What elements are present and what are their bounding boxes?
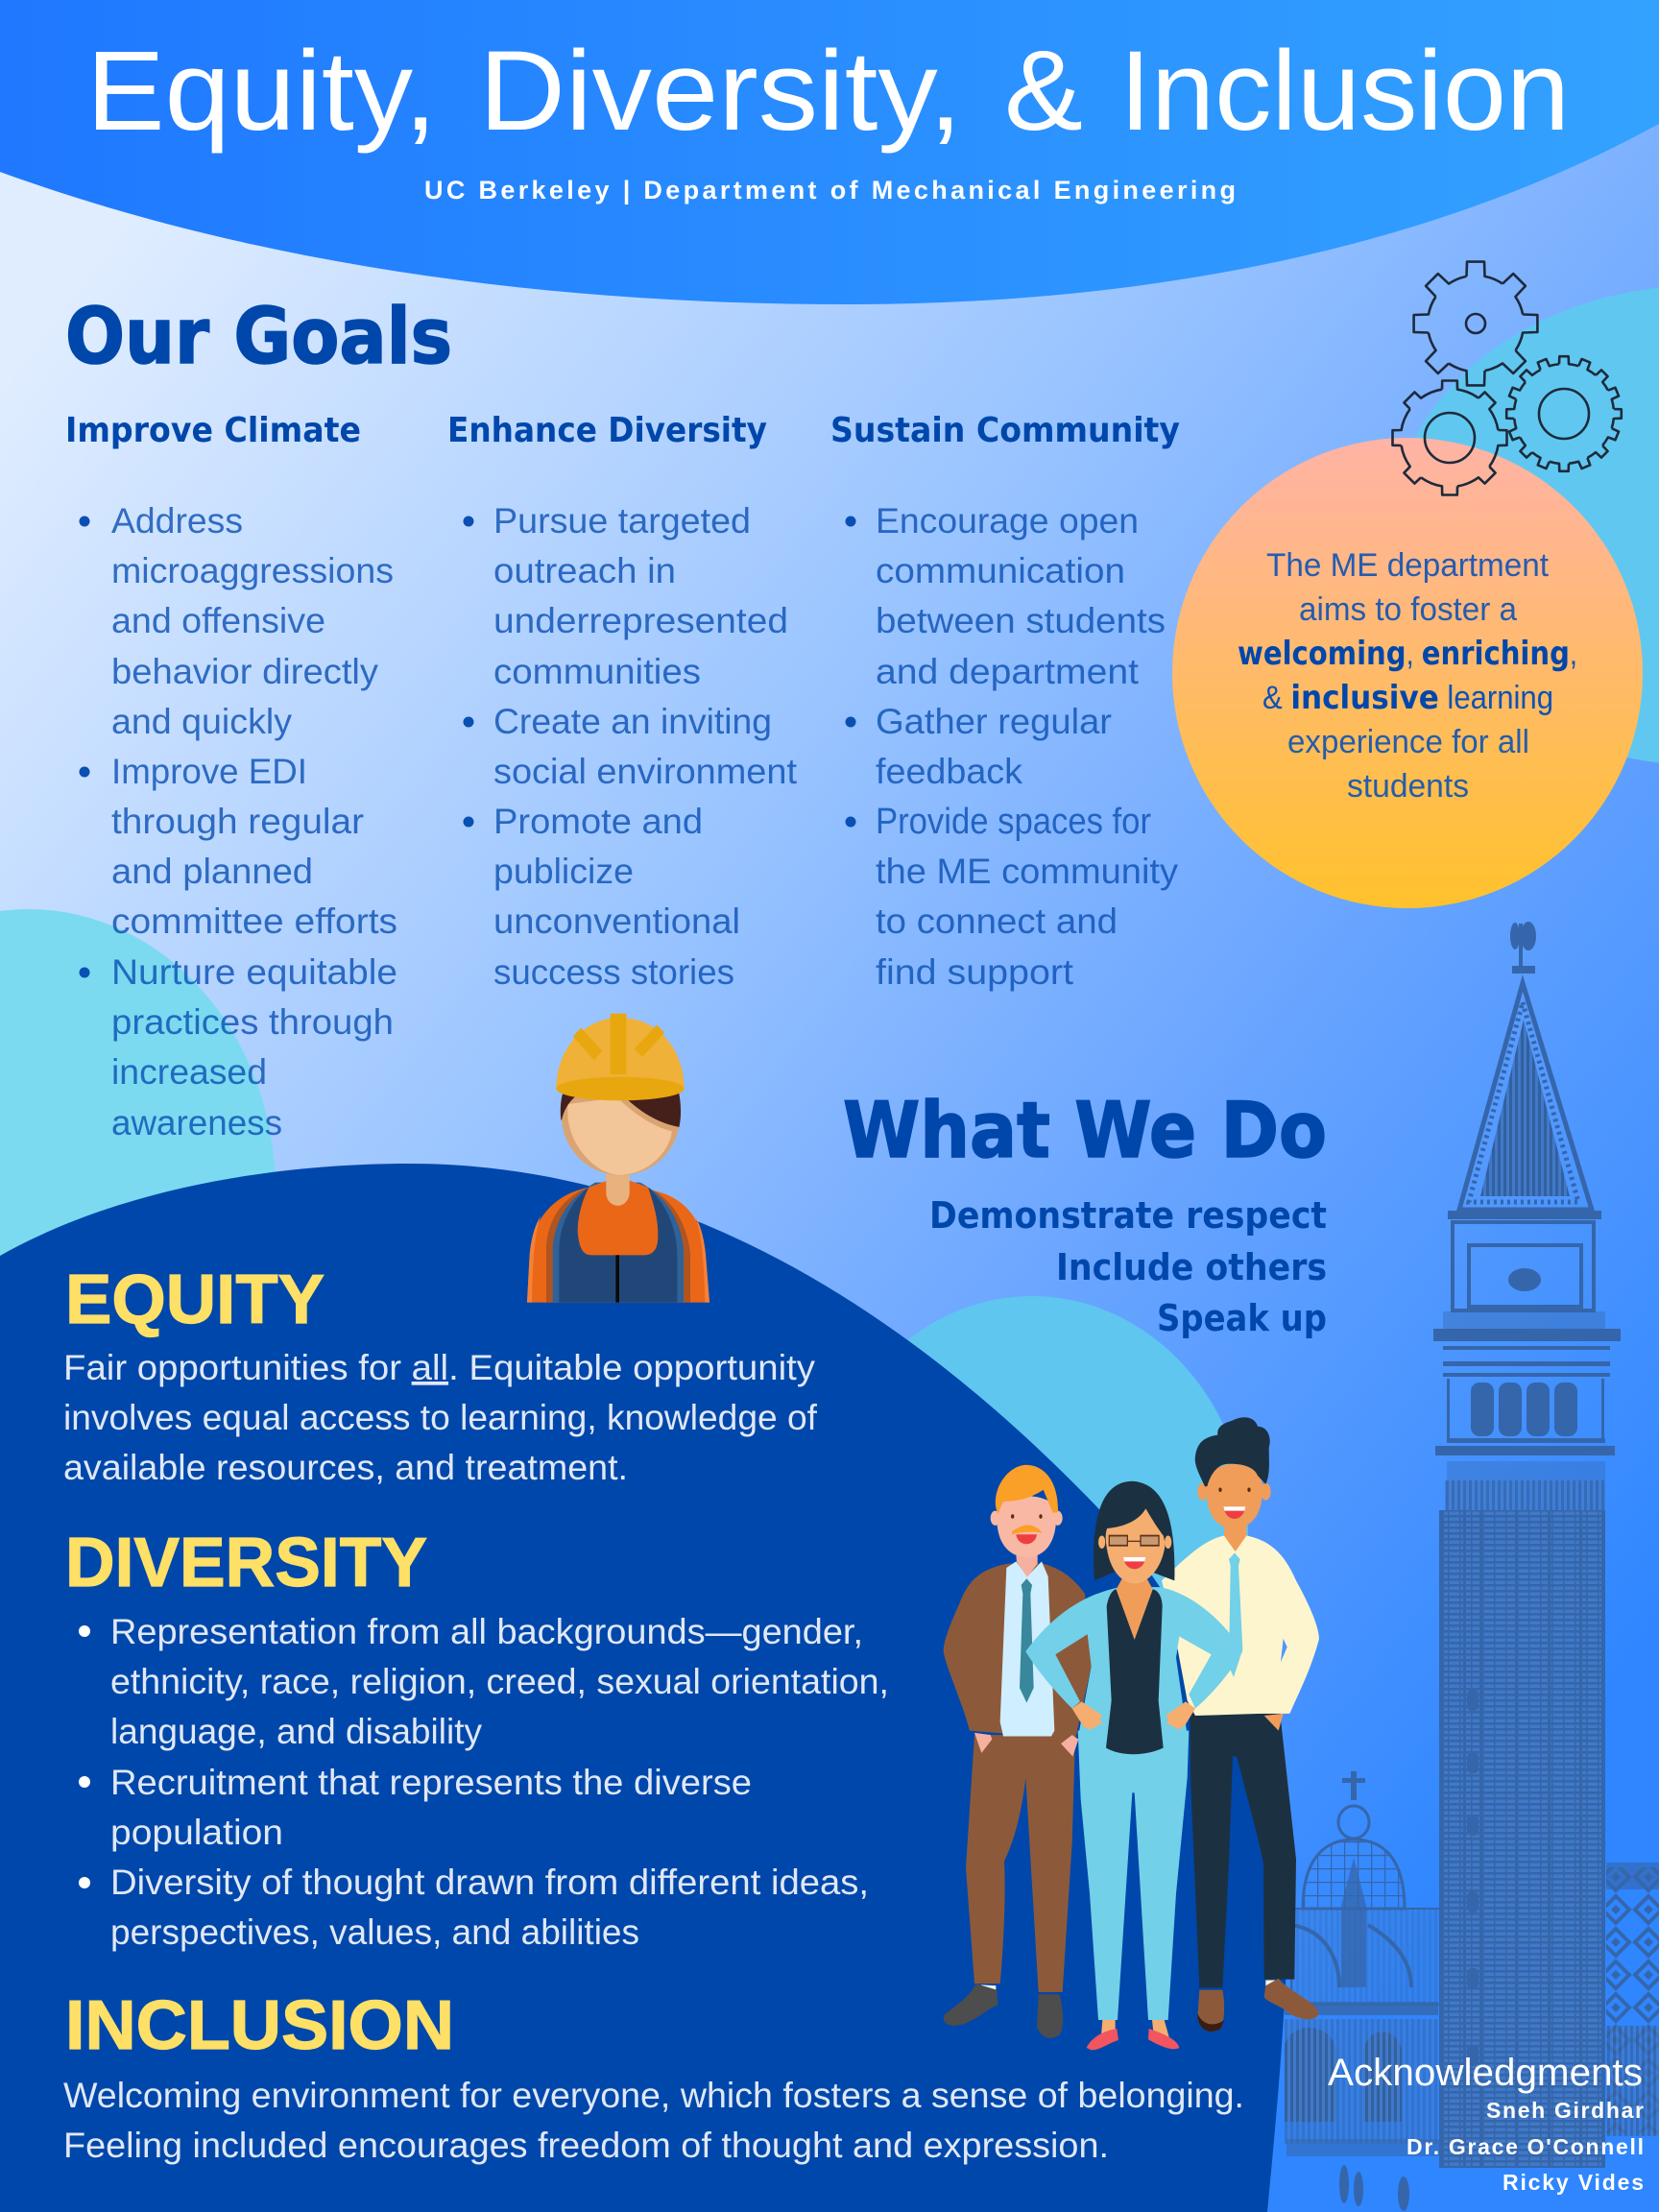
callout: mission circle: welcoming, enriching, [1238,635,1577,673]
title: Inclusion [1119,28,1570,155]
list: diversity points: perspectives, values, and abilities [110,1912,639,1952]
text: inclusion definition: Feeling included encourages freedom of thought and expression. [63,2126,1109,2165]
title: & [1004,28,1083,155]
panel: improve climate: and offensive [111,601,325,640]
basilica [1285,1771,1498,2211]
panel: sustain community: Encourage open [876,501,1139,541]
text: inclusion definition: Welcoming environment for everyone, which fosters a sense of belonging. [63,2076,1244,2115]
right palace [1606,1863,1659,2136]
figure: man in cream shirt [1162,1417,1319,2032]
heading: What We Do: What We Do [843,1086,1327,1175]
list: diversity points: Diversity of thought drawn from different ideas, [110,1863,869,1902]
heading: INCLUSION: INCLUSION [65,1987,454,2064]
title [86,28,1570,155]
panel: sustain community: Gather regular [876,702,1112,741]
panel: enhance diversity: unconventional [493,902,740,941]
panel: enhance diversity: communities [493,652,701,691]
text: acknowledgments: Dr. Grace O'Connell [1407,2134,1644,2159]
callout: mission circle: The ME department [1266,547,1550,584]
text: equity definition: Fair opportunities for all. Equitable opportunity [63,1348,816,1387]
panel: sustain community: between students [876,601,1166,640]
column heading: Sustain Community [830,411,1180,450]
panel: enhance diversity [447,411,798,992]
panel: improve climate: Improve EDI [111,752,307,791]
list: diversity points: population [110,1813,283,1852]
column heading: Enhance Diversity [447,411,767,450]
text: acknowledgments: Sneh Girdhar [1486,2098,1644,2123]
list: actions [929,1194,1327,1339]
panel: sustain community: find support [876,952,1074,992]
panel: navy definitions background [0,1164,1286,2212]
heading: Our Goals: Our Goals [65,292,452,381]
panel: improve climate: and planned [111,852,313,891]
callout: mission circle [1172,438,1643,908]
text: equity definition: involves equal access to learning, knowledge of [63,1398,818,1437]
panel: sustain community [830,411,1180,992]
panel: improve climate: microaggressions [111,551,394,590]
list: actions: Speak up [1157,1297,1327,1339]
list: diversity points [79,1612,889,1952]
icon: gears [1389,261,1623,498]
blob: turquoise behind people [816,1296,1248,1776]
column heading: Improve Climate [65,411,361,450]
figure: man in brown suit [944,1465,1092,2038]
header curved panel [0,0,1659,304]
list: diversity points: Representation from all backgrounds—gender, [110,1612,863,1651]
panel: enhance diversity: success stories [493,952,734,992]
panel: improve climate: increased [111,1052,267,1092]
panel: improve climate: behavior directly [111,652,379,691]
panel: sustain community: Provide spaces for [876,802,1151,842]
heading: DIVERSITY: DIVERSITY [65,1525,427,1601]
panel: improve climate: and quickly [111,702,293,741]
panel: improve climate: awareness [111,1103,282,1142]
blob: right turquoise [1394,285,1659,765]
subtitle: UC Berkeley | Department of Mechanical Engineering [424,176,1236,204]
panel: improve climate: Address [111,501,243,541]
panel: sustain community: and department [876,652,1140,691]
text: inclusion definition [63,2076,1244,2165]
title: Equity, [86,28,437,155]
panel: enhance diversity: Create an inviting [493,702,772,741]
heading: EQUITY: EQUITY [65,1262,325,1338]
panel: enhance diversity: publicize [493,852,634,891]
text: acknowledgments [1328,2052,1644,2195]
figure: woman in blue suit [1025,1481,1242,2050]
panel: sustain community: communication [876,551,1125,590]
title: Diversity, [479,28,962,155]
text: acknowledgments: Ricky Vides [1503,2170,1644,2195]
callout: mission circle: & inclusive learning [1262,679,1553,717]
panel: enhance diversity: Pursue targeted [493,501,751,541]
list: diversity points: Recruitment that represents the diverse [110,1763,752,1802]
illustration: three colleagues [944,1417,1319,2050]
panel: enhance diversity: underrepresented [493,601,788,640]
list: diversity points: ethnicity, race, religion, creed, sexual orientation, [110,1662,889,1701]
panel: sustain community: to connect and [876,902,1118,941]
list: actions: Demonstrate respect [929,1194,1327,1237]
panel: enhance diversity: outreach in [493,551,676,590]
text: acknowledgments: Acknowledgments [1328,2052,1643,2094]
panel: enhance diversity: social environment [493,752,798,791]
panel: improve climate [65,411,397,1142]
callout: mission circle: aims to foster a [1299,591,1517,628]
panel: enhance diversity: Promote and [493,802,703,841]
text: equity definition [63,1348,818,1487]
callout: mission circle: students [1347,768,1469,805]
list: actions: Include others [1056,1246,1327,1288]
blob: left turquoise [0,909,276,1472]
text: equity definition: available resources, and treatment. [63,1448,628,1487]
tower [1433,922,1621,2168]
list: diversity points: language, and disability [110,1712,482,1751]
panel: sustain community: feedback [876,752,1023,791]
panel: improve climate: Nurture equitable [111,952,397,992]
panel: sustain community: the ME community [876,852,1179,891]
callout: mission circle: experience for all [1287,724,1529,760]
panel: improve climate: committee efforts [111,902,397,941]
illustration: campanile and basilica [1285,922,1659,2211]
panel: improve climate: through regular [111,802,364,841]
panel: improve climate: practices through [111,1002,394,1042]
illustration: construction worker [527,1014,709,1303]
